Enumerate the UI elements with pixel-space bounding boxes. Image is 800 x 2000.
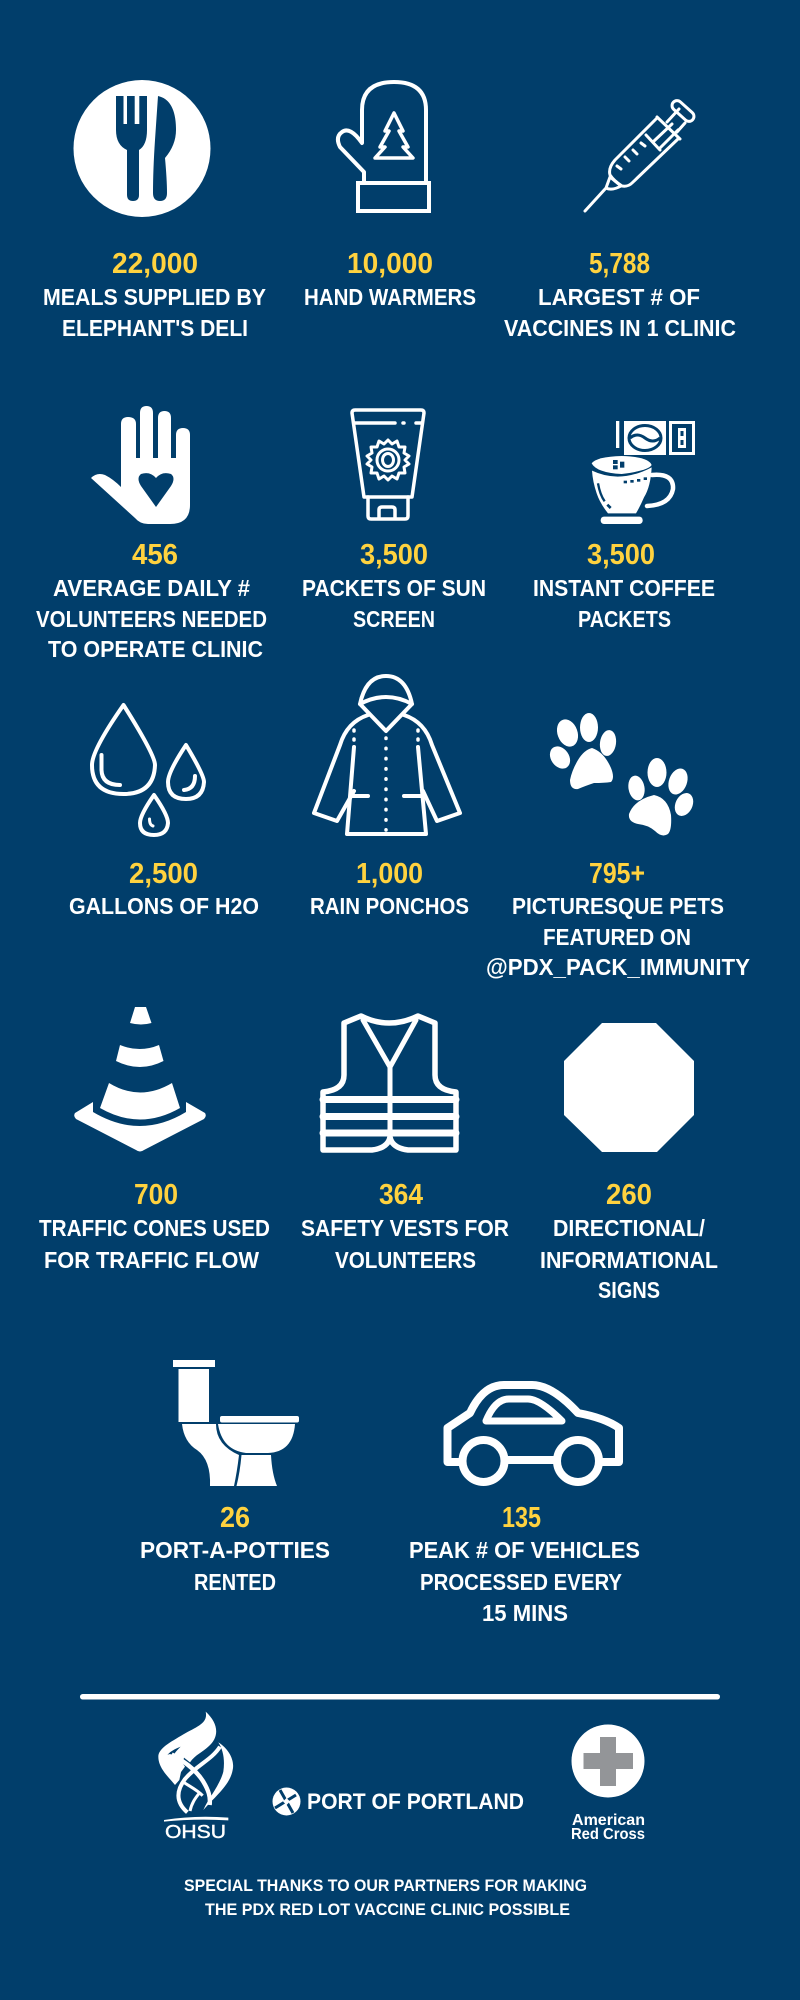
stat: hand warmers [304, 82, 476, 310]
label [39, 1215, 270, 1273]
label: RAIN PONCHOS [310, 893, 469, 919]
label: ELEPHANT'S DELI [62, 315, 248, 341]
label: TO OPERATE CLINIC [48, 636, 263, 662]
icon: fork and knife on plate [74, 80, 210, 217]
icon: car [448, 1385, 619, 1482]
logo: American Red Cross: American [572, 1812, 645, 1829]
label: PEAK # OF VEHICLES [409, 1537, 640, 1563]
logo: Port of Portland: PORT OF PORTLAND [307, 1789, 524, 1814]
number: 456 [132, 539, 178, 571]
number: 3,500 [587, 539, 655, 571]
logo: American Red Cross: Red Cross [571, 1826, 645, 1843]
icon: mitten [338, 82, 429, 211]
icon: raincoat [314, 676, 460, 834]
icon: paw prints [546, 713, 697, 835]
icon: coffee cup and packet [592, 421, 694, 524]
label: INFORMATIONAL [540, 1247, 718, 1273]
stat: rain ponchos [310, 676, 469, 919]
icon: sunscreen tube [352, 410, 424, 519]
icon: toilet [173, 1360, 299, 1486]
label [140, 1537, 330, 1595]
label [409, 1537, 640, 1626]
label: PORT-A-POTTIES [140, 1537, 330, 1563]
label: 15 MINS [482, 1600, 568, 1626]
footer divider [80, 1694, 720, 1700]
label: MEALS SUPPLIED BY [43, 284, 266, 310]
label [533, 575, 715, 632]
stat: signs [540, 1023, 718, 1303]
label [302, 575, 486, 632]
icon: hand with heart [91, 406, 190, 524]
icon: syringe [585, 99, 696, 211]
stat: port-a-potties [140, 1360, 330, 1595]
logo: OHSU: OHSU [165, 1822, 226, 1842]
label: PACKETS [578, 606, 671, 632]
stat: safety vests [301, 1016, 509, 1273]
number: 795+ [589, 858, 645, 890]
number: 2,500 [129, 858, 198, 890]
number: 260 [606, 1179, 652, 1211]
label [36, 575, 267, 662]
stat: vaccines [504, 99, 736, 341]
number: 700 [134, 1179, 178, 1211]
label: SCREEN [353, 606, 435, 632]
thanks note: SPECIAL THANKS TO OUR PARTNERS FOR MAKING [184, 1876, 587, 1895]
label: AVERAGE DAILY # [53, 575, 250, 601]
stat: meals [43, 80, 266, 341]
number: 135 [502, 1502, 541, 1534]
label: FEATURED ON [543, 924, 691, 950]
icon: safety vest [323, 1016, 456, 1150]
label: LARGEST # OF [538, 284, 700, 310]
stat: coffee [533, 421, 715, 632]
label: VOLUNTEERS NEEDED [36, 606, 267, 632]
label: VOLUNTEERS [335, 1247, 476, 1273]
icon: traffic cone [74, 1007, 206, 1152]
thanks note: THE PDX RED LOT VACCINE CLINIC POSSIBLE [205, 1900, 570, 1919]
label: GALLONS OF H2O [69, 893, 259, 919]
number: 364 [379, 1179, 423, 1211]
label [301, 1215, 509, 1273]
icon: octagon sign [564, 1023, 694, 1152]
label: VACCINES IN 1 CLINIC [504, 315, 736, 341]
label [504, 284, 736, 341]
label: RENTED [194, 1569, 276, 1595]
stat: volunteers [36, 406, 267, 662]
label: PROCESSED EVERY [420, 1569, 622, 1595]
number: 1,000 [356, 858, 423, 890]
stat: sun screen [302, 410, 486, 632]
number: 3,500 [360, 539, 428, 571]
number: 22,000 [112, 248, 198, 280]
label: @PDX_PACK_IMMUNITY [486, 954, 750, 980]
label: TRAFFIC CONES USED [39, 1215, 270, 1241]
number: 5,788 [589, 248, 650, 280]
label [486, 893, 750, 980]
label [43, 284, 266, 341]
thanks note [184, 1876, 587, 1919]
label [540, 1215, 718, 1303]
label: PACKETS OF SUN [302, 575, 486, 601]
logo: American Red Cross [571, 1724, 645, 1843]
label: SIGNS [598, 1277, 660, 1303]
label: DIRECTIONAL/ [553, 1215, 705, 1241]
stat: vehicles [409, 1385, 640, 1626]
label: PICTURESQUE PETS [512, 893, 724, 919]
label: HAND WARMERS [304, 284, 476, 310]
number: 26 [220, 1502, 250, 1534]
stat: traffic cones [39, 1007, 270, 1273]
label: FOR TRAFFIC FLOW [44, 1247, 260, 1273]
logo: OHSU [158, 1712, 233, 1842]
label: SAFETY VESTS FOR [301, 1215, 509, 1241]
number: 10,000 [347, 248, 433, 280]
icon: water drops [92, 705, 204, 835]
stat: water [69, 705, 259, 919]
label: INSTANT COFFEE [533, 575, 715, 601]
stat: pets [486, 713, 750, 980]
